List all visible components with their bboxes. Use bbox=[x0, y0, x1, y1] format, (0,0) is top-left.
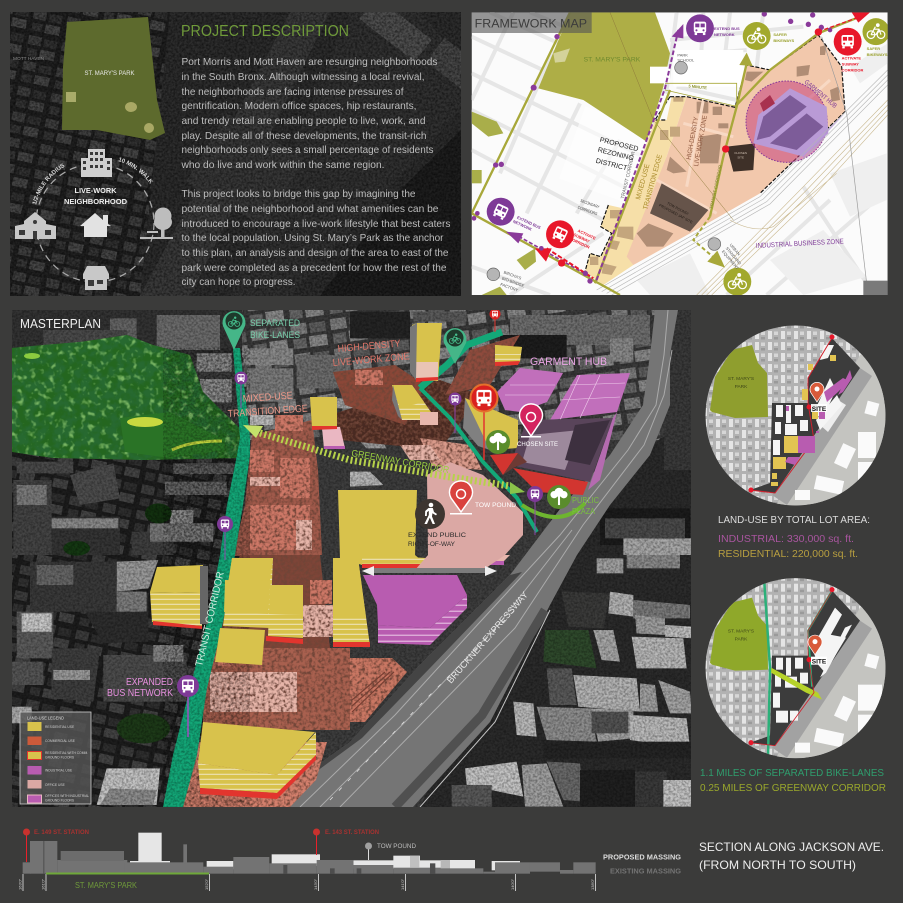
text block: project description: introduced to encourage a live-work lifestyle that best caters bbox=[182, 218, 450, 230]
pin: site bbox=[808, 635, 827, 666]
tick labels: 140'0" bbox=[510, 878, 515, 890]
rail lines bbox=[597, 70, 888, 295]
text block: project description: who do live and work within the same region. bbox=[181, 159, 384, 171]
panel: masterplan aerial bbox=[12, 308, 695, 807]
label: high-density live-work zone: LIVE-WORK ZONE bbox=[332, 351, 410, 369]
marker: tow pound: TOW POUND bbox=[377, 844, 417, 850]
marker: separated bike-lanes bbox=[222, 311, 300, 350]
label: transit corridor west: TRANSIT CORRIDOR bbox=[620, 151, 637, 199]
legend labels: OFFICES WITH INDUSTRIAL bbox=[45, 794, 89, 798]
park line and label: ST. MARY'S PARK bbox=[75, 881, 138, 890]
framework labels: NETWORK bbox=[714, 32, 735, 37]
grey nodes bbox=[487, 61, 721, 281]
marker: bus garment bbox=[448, 392, 462, 433]
circle map: land use bbox=[705, 325, 887, 507]
block west bbox=[150, 565, 208, 629]
map title: FRAMEWORK MAP bbox=[475, 17, 587, 31]
label: mott haven: MOTT HAVEN bbox=[13, 56, 44, 61]
text block: project description: to the local population. Using St. Mary’s Park as the anchor bbox=[182, 232, 444, 244]
corridors bbox=[472, 12, 860, 295]
icon: tree and bench bbox=[140, 208, 173, 239]
text block: project description: to this plan, an analysis and design of the area to east of the bbox=[182, 247, 449, 259]
street grid bbox=[472, 12, 883, 295]
marker: e. 149 st. station: E. 149 ST. STATION bbox=[34, 829, 89, 836]
park: ST. MARY'S PARK bbox=[584, 56, 641, 63]
tick labels: 161'0" bbox=[40, 878, 46, 890]
park bbox=[538, 12, 670, 142]
label: proposed rezoning district bbox=[596, 137, 638, 170]
framework labels: ACTIVATE bbox=[577, 228, 597, 241]
framework labels: CORRIDOR bbox=[842, 67, 863, 72]
marker: bus plaza bbox=[527, 486, 543, 535]
offices strip bbox=[447, 555, 510, 565]
text block: project description: gentrification. Modern office spaces, hip restaurants, bbox=[182, 100, 416, 112]
legend: LAND-USE LEGEND bbox=[27, 716, 64, 722]
icon: storefront bbox=[83, 266, 109, 290]
label: high-density live-work zone: HIGH-DENSITY bbox=[337, 339, 401, 355]
icon: house bbox=[80, 213, 111, 237]
framework labels: BIO-BRIDGE bbox=[501, 276, 525, 288]
text block: project description: city can hope to progress. bbox=[182, 276, 296, 288]
marker: extend public right-of-way bbox=[408, 499, 466, 548]
rezoning zone: PROPOSED JAP SITE bbox=[658, 203, 694, 225]
label: mixed-use transition edge: TRANSITION EDGE bbox=[227, 403, 308, 420]
marker: expanded bus network bbox=[107, 675, 199, 737]
legend labels: RESIDENTIAL WITH COMM. bbox=[45, 751, 88, 755]
framework labels: SAFER bbox=[773, 32, 787, 37]
proposed massing silhouette bbox=[130, 833, 520, 870]
text block: project description: play. Despite all of these developments, the transit-rich bbox=[182, 130, 427, 142]
marker: chosen site bbox=[517, 404, 559, 448]
label: high-density live-work zone bbox=[332, 339, 410, 369]
pin: site: SITE bbox=[812, 406, 827, 413]
label: st. mary's park: PARK bbox=[735, 384, 748, 390]
label: transit corridor east: TRANSIT CORRIDOR bbox=[709, 164, 723, 210]
tick labels: 143'0" bbox=[313, 878, 318, 890]
legend labels: COMMERCIAL USE bbox=[45, 739, 76, 743]
text block: project description bbox=[181, 56, 450, 288]
marker: separated bike-lanes: BIKE-LANES bbox=[250, 330, 300, 340]
icon: activate subway east bbox=[834, 28, 862, 56]
label: st. mary's park bbox=[728, 376, 754, 390]
label: st. mary's park: PARK bbox=[735, 637, 748, 643]
framework icons bbox=[482, 14, 889, 296]
marker: public plaza: PLAZA bbox=[572, 507, 596, 516]
existing massing silhouette bbox=[23, 841, 596, 874]
framework labels: 5 MINUTE bbox=[688, 83, 708, 90]
greenway bbox=[771, 668, 822, 700]
massing: residential blocks bbox=[150, 323, 522, 799]
site axis arrows bbox=[362, 566, 497, 576]
label: mixed-use transition edge bbox=[636, 154, 662, 209]
industrial massing bbox=[363, 575, 467, 645]
framework labels: SAFER bbox=[867, 46, 880, 51]
marker: bike pin east bbox=[444, 328, 466, 364]
label: garment hub: GARMENT HUB bbox=[530, 356, 607, 368]
block west tower bbox=[310, 397, 345, 449]
block central south bbox=[215, 628, 265, 665]
marker: tow pound bbox=[450, 481, 516, 514]
marker: park icon bbox=[486, 430, 510, 454]
framework labels: ACTIVATE bbox=[842, 55, 861, 60]
block central north bbox=[223, 558, 273, 628]
label: st. mary's park: ST. MARY'S bbox=[728, 376, 754, 382]
framework labels: FACTORY bbox=[500, 282, 519, 293]
pin: site: SITE bbox=[812, 659, 827, 666]
legend labels: OFFICE USE bbox=[45, 783, 66, 787]
label: mixed-use transition edge bbox=[227, 391, 308, 420]
text block: project description: the neighborhoods are facing intense pressures of bbox=[182, 86, 404, 98]
arrows bbox=[506, 12, 870, 268]
rezoning zone: CHOSEN bbox=[734, 151, 747, 155]
marker: tow pound bbox=[365, 842, 417, 860]
text: bike-lane and greenway totals: 1.1 MILES OF SEPARATED BIKE-LANES bbox=[700, 767, 884, 779]
framework labels: BIKEWAYS bbox=[773, 38, 795, 43]
label: high-density live-work zone bbox=[686, 115, 707, 166]
framework labels: SCHOOL bbox=[677, 57, 695, 62]
live-work diagram bbox=[15, 149, 173, 290]
texture bbox=[12, 310, 691, 807]
text: bike-lane and greenway totals: 0.25 MILES OF GREENWAY CORRIDOR bbox=[700, 782, 886, 794]
legend labels: INDUSTRIAL USE bbox=[45, 768, 73, 772]
marker: extend public right-of-way: EXTEND PUBLIC bbox=[408, 532, 466, 539]
framework labels bbox=[500, 26, 888, 293]
block northeast bbox=[495, 345, 522, 366]
framework labels: SUBWAY bbox=[573, 232, 591, 244]
title: masterplan: MASTERPLAN bbox=[20, 317, 101, 331]
buildings north bbox=[43, 315, 350, 425]
tick labels: 138'0" bbox=[590, 878, 595, 890]
legend labels: GROUND FLOORS bbox=[45, 798, 75, 802]
icon: school bbox=[15, 212, 56, 239]
greenery bbox=[472, 112, 536, 295]
text: land-use by total lot area bbox=[718, 514, 870, 560]
rezoning zone: TOW POUND/ bbox=[666, 201, 690, 216]
marker: e. 143 st. station bbox=[313, 828, 379, 855]
greenway corridor bbox=[243, 425, 525, 494]
framework labels: EXTEND BUS bbox=[714, 26, 740, 31]
buildings southwest bbox=[13, 462, 233, 556]
marker: subway north bbox=[490, 308, 500, 332]
ground ticks bbox=[23, 874, 596, 891]
icon: office building bbox=[81, 149, 112, 177]
framework labels: URBAN bbox=[729, 242, 741, 256]
buildings southeast bbox=[452, 555, 692, 807]
marker: public plaza: PUBLIC bbox=[572, 496, 599, 505]
block center site bbox=[338, 490, 427, 568]
park overlay: ST. MARY'S PARK bbox=[84, 71, 134, 77]
garment hub circle bbox=[746, 81, 845, 162]
marker: chosen site: CHOSEN SITE bbox=[517, 441, 559, 448]
icon: safer bikeways south bbox=[723, 268, 751, 296]
panel: framework map bbox=[472, 11, 889, 296]
expressway bbox=[258, 310, 678, 807]
framework labels: EQUIPMENT bbox=[721, 249, 740, 271]
legend: proposed massing: PROPOSED MASSING bbox=[603, 852, 681, 862]
icon: safer bikeways bbox=[743, 22, 771, 50]
framework labels: BIRCHA'S bbox=[503, 270, 522, 281]
framework labels: SECONDARY bbox=[580, 198, 600, 210]
framework labels: EXTEND BUS bbox=[516, 215, 542, 230]
block chosen north bbox=[463, 398, 518, 450]
framework labels: CORRIDOR bbox=[569, 236, 591, 250]
section title: SECTION ALONG JACKSON AVE. bbox=[699, 840, 884, 854]
marker: bus north bbox=[234, 372, 248, 408]
section title: (FROM NORTH TO SOUTH) bbox=[699, 858, 856, 872]
white blocks bbox=[559, 50, 743, 204]
marker: public plaza bbox=[547, 485, 599, 516]
rezoning zone: SITE bbox=[737, 155, 744, 159]
framework labels: STANDARD bbox=[725, 246, 742, 266]
text: land-use by total lot area: RESIDENTIAL: 220,000 sq. ft. bbox=[718, 548, 858, 560]
marker: e. 149 st. station bbox=[23, 828, 89, 862]
circle map: bike lanes bbox=[705, 578, 887, 760]
label: bruckner expressway: BRUCKNER EXPRESSWAY bbox=[445, 590, 530, 685]
salmon context buildings bbox=[180, 335, 520, 807]
aerial base bbox=[12, 310, 691, 807]
legend: existing massing: EXISTING MASSING bbox=[610, 866, 681, 876]
marker: subway bbox=[470, 384, 498, 460]
legend labels bbox=[45, 725, 89, 802]
tick labels: 152'0" bbox=[204, 878, 209, 890]
block jackson bbox=[333, 558, 370, 647]
marker: tow pound: TOW POUND bbox=[475, 502, 516, 509]
tower bbox=[410, 323, 442, 382]
marker: separated bike-lanes: SEPARATED bbox=[250, 318, 300, 328]
legend bbox=[20, 712, 91, 804]
marker: expanded bus network: EXPANDED bbox=[126, 677, 173, 688]
text: live-work neighborhood: NEIGHBORHOOD bbox=[64, 197, 128, 206]
icon: activate subway west bbox=[546, 220, 574, 248]
label: transit corridor: TRANSIT CORRIDOR bbox=[193, 570, 227, 668]
map title bbox=[472, 12, 592, 33]
label: mixed-use transition edge: MIXED-USE bbox=[242, 391, 293, 405]
live-work diagram: 1/2-MILE RADIUS bbox=[32, 164, 64, 205]
marker: e. 143 st. station: E. 143 ST. STATION bbox=[325, 829, 379, 836]
text: land-use by total lot area: LAND-USE BY TOTAL LOT AREA: bbox=[718, 514, 870, 526]
label: proposed rezoning district: REZONING bbox=[597, 147, 634, 163]
label: high-density live-work zone: HIGH-DENSITY bbox=[686, 116, 700, 160]
label: high-density live-work zone: LIVE-WORK ZONE bbox=[693, 114, 709, 167]
tow pound site bbox=[415, 462, 523, 570]
label: proposed rezoning district: PROPOSED bbox=[599, 137, 639, 153]
icon: extend bus north bbox=[686, 14, 714, 42]
legend swatches bbox=[28, 722, 42, 803]
label: proposed rezoning district: DISTRICT bbox=[595, 158, 629, 173]
heading: project description: PROJECT DESCRIPTION bbox=[181, 23, 349, 40]
section title bbox=[699, 840, 884, 872]
label: mixed-use transition edge: TRANSITION EDGE bbox=[643, 154, 664, 211]
rezoning zone bbox=[585, 35, 845, 285]
framework labels: BIKEWAYS bbox=[867, 52, 888, 57]
text block: project description: neighborhoods only sees a small percentage of residents bbox=[182, 144, 434, 156]
text block: project description: in the South Bronx. Although witnessing a local revival, bbox=[182, 71, 424, 83]
framework labels: PARK bbox=[677, 53, 688, 58]
text: land-use by total lot area: INDUSTRIAL: 330,000 sq. ft. bbox=[718, 533, 854, 545]
tick labels bbox=[18, 878, 595, 890]
bike and transit corridors bbox=[163, 332, 585, 807]
label: garment hub: GARMENT HUB bbox=[803, 79, 838, 110]
label: mixed-use transition edge: MIXED-USE bbox=[635, 163, 652, 201]
bike lanes bbox=[764, 578, 770, 758]
text block: project description: and trendy retail are enabling people to live, work, and bbox=[182, 115, 426, 127]
text: bike-lane and greenway totals bbox=[700, 767, 886, 794]
label: st. mary's park bbox=[728, 629, 754, 643]
block central bbox=[266, 585, 303, 644]
corridor nodes bbox=[472, 11, 832, 284]
label: st. mary's park: ST. MARY'S bbox=[728, 629, 754, 635]
pin: site bbox=[810, 382, 827, 413]
block north mid bbox=[392, 385, 438, 425]
section along jackson ave bbox=[18, 828, 884, 891]
garment hub massing bbox=[490, 368, 630, 495]
tick labels: 141'0" bbox=[400, 878, 405, 890]
framework labels: NETWORK bbox=[512, 219, 533, 232]
framework labels: CORRIDORS bbox=[577, 205, 598, 216]
text block: project description: park were completed as a precedent for how the rest of the bbox=[182, 262, 447, 274]
text: live-work neighborhood bbox=[64, 186, 128, 206]
greenway corridor: GREENWAY CORRIDOR bbox=[350, 448, 450, 476]
park bbox=[12, 335, 252, 460]
live-work diagram: 10 MIN. WALK bbox=[118, 158, 154, 184]
text block: project description: This project looks to bridge this gap by imagining the bbox=[182, 188, 416, 200]
park overlay bbox=[62, 17, 165, 140]
icon: extend bus west bbox=[486, 198, 515, 226]
text block: project description: potential of the neighborhood and what amenities can be bbox=[182, 203, 439, 215]
block south bbox=[198, 722, 316, 799]
legend labels: RESIDENTIAL USE bbox=[45, 725, 75, 729]
framework labels: SUBWAY bbox=[842, 61, 859, 66]
tick labels: 163'0" bbox=[18, 878, 22, 890]
land-use overlay bbox=[771, 355, 852, 486]
icon: safer bikeways east bbox=[862, 18, 889, 45]
label: industrial business zone: INDUSTRIAL BUSINESS ZONE bbox=[756, 238, 844, 250]
legend labels: GROUND FLOORS bbox=[45, 756, 75, 760]
marker: extend public right-of-way: RIGHT-OF-WAY bbox=[408, 541, 456, 548]
text block: project description: Port Morris and Mott Haven are resurging neighborhoods bbox=[182, 56, 438, 68]
marker: bus mid bbox=[217, 516, 233, 560]
marker: expanded bus network: BUS NETWORK bbox=[107, 688, 173, 699]
text: live-work neighborhood: LIVE-WORK bbox=[74, 186, 117, 195]
